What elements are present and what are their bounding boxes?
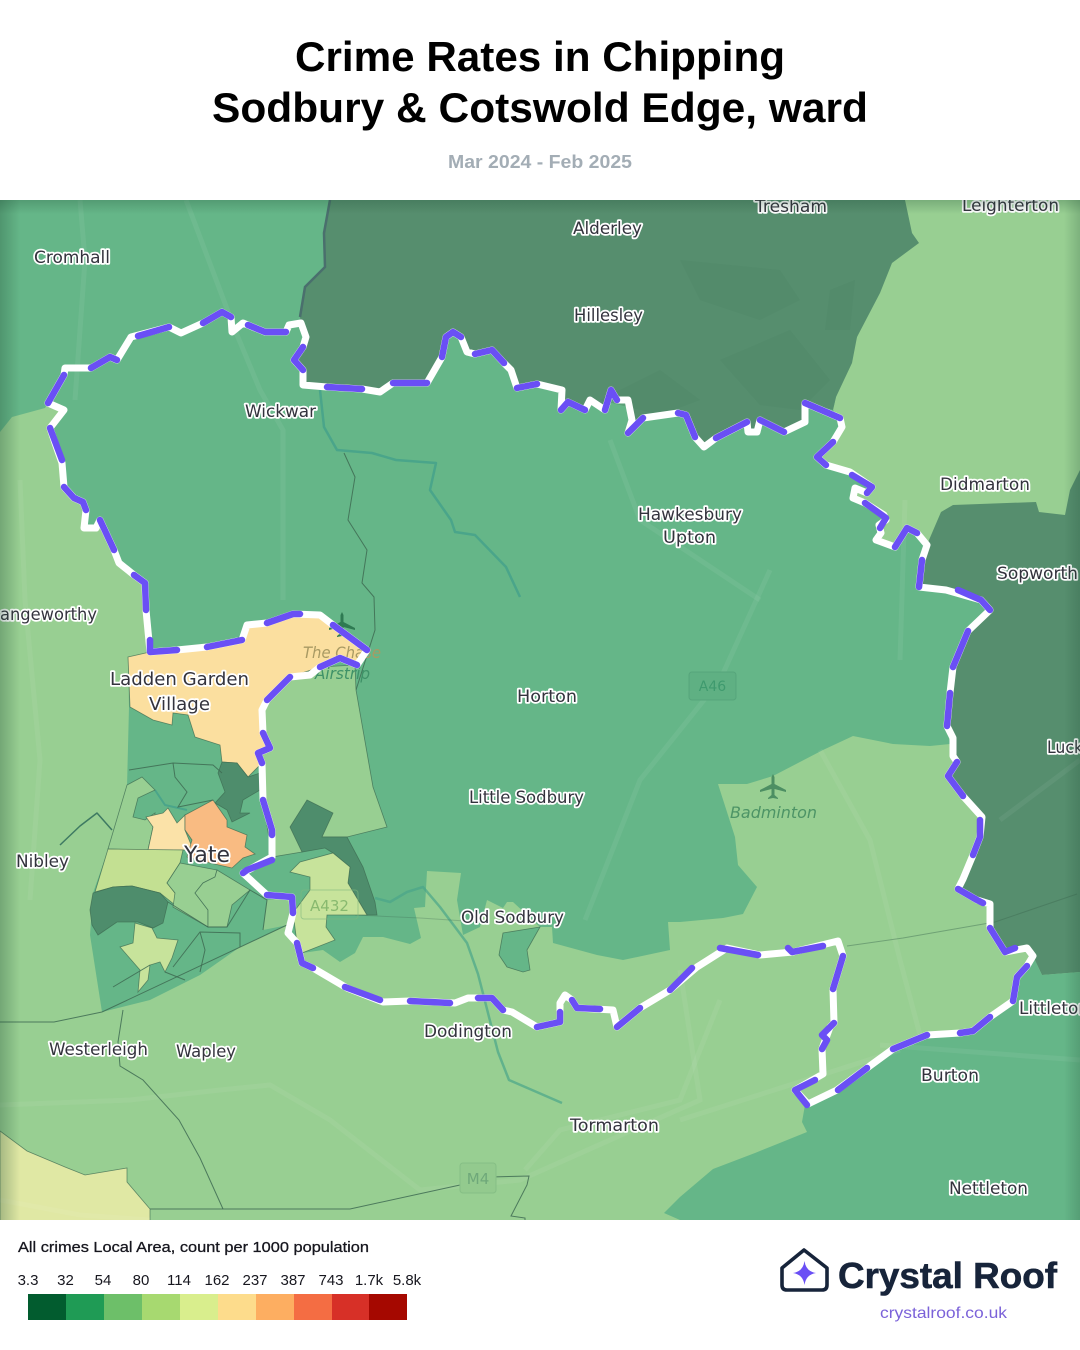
road shield: M4 xyxy=(460,1163,496,1193)
rivers and streams xyxy=(60,390,562,1103)
Yate neighbourhoods xyxy=(90,762,260,992)
legend colour scale xyxy=(28,1294,407,1320)
base area: light green xyxy=(0,200,1080,1220)
Yate internal lines xyxy=(102,763,287,1012)
pale yellow region south-west xyxy=(0,1131,150,1226)
road shield: A46: A46 xyxy=(699,679,726,695)
darker woodland patches xyxy=(611,399,626,406)
legend values: 1.7k xyxy=(355,1272,384,1289)
medium green region south-east xyxy=(664,956,1080,1220)
place labels: Burton xyxy=(921,1066,979,1086)
place labels: angeworthy xyxy=(0,605,97,625)
place labels: Ladden Garden xyxy=(110,669,249,690)
legend values: 743 xyxy=(318,1272,344,1289)
logo: Crystal Roof xyxy=(782,1250,1058,1322)
place labels: Wickwar xyxy=(245,402,316,422)
thin parish lines xyxy=(0,453,1077,1220)
label: Badminton: Badminton xyxy=(730,803,817,822)
road shield: M4: M4 xyxy=(467,1170,489,1188)
place labels: Westerleigh xyxy=(49,1040,148,1060)
legend values xyxy=(18,1272,422,1289)
legend values: 387 xyxy=(280,1272,306,1289)
title xyxy=(212,33,868,131)
roads, faint xyxy=(73,208,1072,1072)
title: Sodbury & Cotswold Edge, ward xyxy=(212,84,868,131)
place labels: Alderley xyxy=(573,219,642,239)
legend values: 54 xyxy=(95,1272,111,1289)
airstrip label: The Chase xyxy=(303,643,381,662)
place labels: Old Sodbury xyxy=(461,908,564,928)
title: Crime Rates in Chipping xyxy=(295,33,785,80)
place labels: Little Sodbury xyxy=(469,788,584,808)
place labels: Didmarton xyxy=(940,475,1030,495)
legend values: 3.3 xyxy=(18,1272,38,1289)
road shield: A432: A432 xyxy=(310,897,349,915)
icon: house with star xyxy=(782,1250,827,1290)
place labels: Leighterton xyxy=(962,196,1059,216)
place labels: Cromhall xyxy=(34,248,110,268)
light green pocket east of Yate xyxy=(262,665,387,857)
road shield: A46 xyxy=(689,672,736,700)
icon: Badminton plane xyxy=(760,774,786,799)
place labels xyxy=(0,196,1080,1199)
icon: airstrip plane xyxy=(329,612,355,637)
place labels: Horton xyxy=(517,687,577,707)
legend values: 80 xyxy=(133,1272,149,1289)
place labels: Sopworth xyxy=(997,564,1078,584)
lime patch at A432 xyxy=(290,853,367,953)
legend xyxy=(18,1239,422,1320)
road shield: A432 xyxy=(301,890,358,919)
ward and north-west medium green area xyxy=(0,200,990,1012)
airstrip label xyxy=(304,646,380,682)
legend values: 162 xyxy=(204,1272,230,1289)
legend values: 114 xyxy=(167,1272,191,1289)
medium green island near Old Sodbury xyxy=(499,927,540,972)
place labels: Nettleton xyxy=(949,1179,1028,1199)
dark brook along county edge xyxy=(300,200,330,317)
place labels: Upton xyxy=(663,528,716,548)
place labels: Tormarton xyxy=(569,1116,659,1136)
dark region north xyxy=(294,200,919,447)
place labels: Tresham xyxy=(754,197,827,217)
map edge shading xyxy=(0,200,1080,1220)
wordmark: Crystal Roof xyxy=(838,1255,1058,1296)
legend values: 5.8k xyxy=(393,1272,422,1289)
place labels: Yate xyxy=(183,843,230,868)
legend title: All crimes Local Area, count per 1000 population xyxy=(18,1239,369,1256)
place labels: Hillesley xyxy=(574,306,643,326)
place labels: Nibley xyxy=(16,852,69,872)
legend values: 237 xyxy=(242,1272,268,1289)
Ladden Garden Village yellow area xyxy=(128,614,367,777)
choropleth map xyxy=(0,196,1080,1226)
legend values: 32 xyxy=(57,1272,74,1289)
place labels: Village xyxy=(149,694,210,715)
place labels: Hawkesbury xyxy=(638,505,742,525)
dark patch east of Yate xyxy=(290,800,377,915)
place labels: Wapley xyxy=(176,1042,236,1062)
dark region east xyxy=(919,470,1080,975)
place labels: Dodington xyxy=(424,1022,512,1042)
website: crystalroof.co.uk xyxy=(880,1305,1008,1322)
light patch by boundary xyxy=(264,899,290,930)
subtitle: date range: Mar 2024 - Feb 2025 xyxy=(448,152,632,172)
ward boundary: white line xyxy=(48,312,1033,1104)
airstrip label: Airstrip xyxy=(314,664,370,683)
ward boundary: purple dashes xyxy=(48,312,1027,1105)
